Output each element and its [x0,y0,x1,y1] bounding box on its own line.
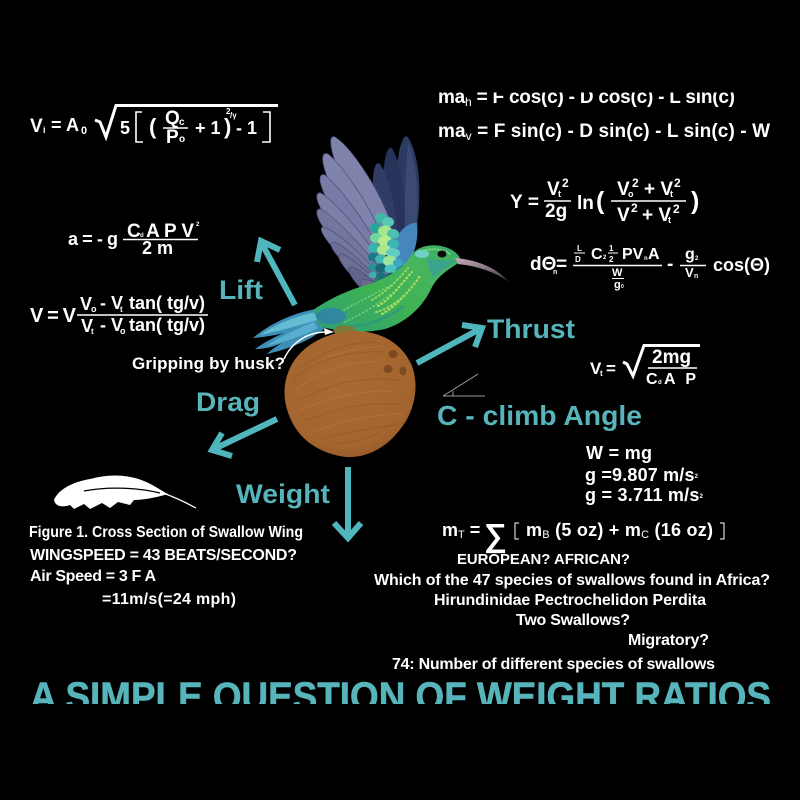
equation: flight path angle: dΘ [530,254,556,275]
text: wing notes: WINGSPEED = 43 BEATS/SECOND? [30,547,297,564]
equation: horizontal motion [439,92,734,107]
text: swallow questions: Two Swallows? [516,612,630,629]
head markings [415,250,456,278]
equation: horizontal motion: h [465,95,472,109]
equation: indicated velocity: 0 [81,125,87,137]
equation: flight path angle: 2 [609,255,614,264]
equation: total mass: (16 oz) [649,520,713,540]
equation: acceleration: C [127,221,141,242]
equation: flight path angle: C [591,246,603,263]
equation: flight path angle: n [644,256,648,262]
equation: terminal velocity: V [590,359,602,378]
equation: indicated velocity: Q [165,108,180,129]
tail [253,309,324,354]
equation: flight path angle: g [685,246,695,263]
equation: indicated velocity: V [30,116,43,137]
arrow: drag [212,419,277,456]
equation: weight and gravity: 2 [700,494,704,500]
equation: indicated velocity: P [166,127,179,148]
equation: weight and gravity: g =9.807 m/s [585,465,694,485]
label: thrust: Thrust [487,314,575,344]
equation: flight path angle: = [556,254,567,275]
equation: acceleration: 2 m [142,238,173,258]
equation: height: ( [596,187,605,215]
equation: total mass [442,517,724,554]
equation: velocity: tan( tg/v) [129,293,205,313]
text: swallow questions: Migratory? [628,632,709,649]
label: drag: Drag [196,387,260,417]
equation: indicated velocity: ( [149,114,157,139]
equation: vertical motion: v [466,129,472,143]
beak [455,258,509,282]
equation: flight path angle: g [614,279,621,291]
equation: velocity [30,293,208,336]
equation: height [510,176,699,226]
equation: terminal velocity: d [658,380,662,386]
equation: flight path angle: V [685,265,694,280]
equation: acceleration: A P V [146,221,194,242]
equation: velocity: t [91,327,94,336]
equation: height: 2 [562,176,569,190]
equation: acceleration [68,221,200,258]
equation: indicated velocity: i [43,125,46,135]
arrow: lift [257,241,295,305]
equation: terminal velocity: t [600,369,603,378]
equation: weight and gravity: 2 [695,474,699,480]
equation: weight and gravity: W = mg [586,443,652,463]
text: swallow questions: 74: Number of different species of swallows [392,656,715,673]
equation: height: t [668,215,671,225]
equation: indicated velocity: /γ [230,111,237,120]
callout: gripping by husk: Gripping by husk? [132,354,285,373]
label: climb angle: C - climb Angle [437,400,642,431]
body speckles [330,249,450,327]
equation: weight and gravity: g = 3.711 m/s [585,485,699,505]
equation: acceleration: a = - g [68,229,118,249]
equation: total mass: (5 oz) + m [550,520,641,540]
equation: indicated velocity: + 1 [195,118,221,138]
equation: indicated velocity: 5 [120,118,130,138]
equation: terminal velocity: 2mg [652,347,691,368]
text: swallow questions: EUROPEAN? AFRICAN? [457,551,630,568]
coconut [284,331,416,457]
icon: feather [54,475,196,509]
equation: indicated velocity: ) [224,114,231,139]
equation: flight path angle: 0 [621,284,624,290]
wing coverts [368,213,404,284]
coconut fibres [292,342,405,444]
equation: flight path angle: cos(Θ) [713,255,770,275]
equation: total mass: ∑ [484,517,507,554]
equation: terminal velocity: A P [664,371,696,388]
text: wing notes [29,524,303,608]
blue scapular feathers [392,223,417,266]
equation: flight path angle: n [553,269,557,276]
feet [333,325,355,337]
equation: indicated velocity: o [179,134,185,145]
equation: height: V [617,179,630,200]
equation: total mass: B [542,529,550,541]
equation: flight path angle: W [612,267,623,279]
equation: flight path angle: A [648,246,660,263]
equation: indicated velocity: = A [51,115,79,135]
equation: flight path angle [530,244,770,291]
equation: velocity: - V [100,293,123,313]
coconut eyes [384,350,406,376]
equation: weight and gravity [585,443,704,505]
equation: acceleration: 2 [196,222,200,228]
equation: flight path angle: - [667,254,673,275]
equation: height: 2 [632,176,639,190]
equation: indicated velocity: 2 [226,107,231,116]
equation: height: + V [644,179,673,200]
equation: total mass: m [442,520,458,540]
equation: terminal velocity: = [606,359,616,378]
equation: flight path angle: D [575,255,581,264]
text: wing notes: =11m/s(=24 mph) [102,591,236,608]
rump patch [316,308,346,324]
front wing feathers [317,137,396,296]
text: swallow questions: Which of the 47 species of swallows found in Africa? [374,572,770,589]
equation: velocity: tan( tg/v) [129,315,205,335]
equation: indicated velocity: c [179,117,185,128]
equation: velocity: o [120,326,126,336]
back wing feathers [366,136,419,248]
eye [438,250,446,258]
equation: height: o [628,189,634,199]
curved white arrow [284,328,334,359]
equation: horizontal motion: ma [438,87,465,108]
equation: flight path angle: 1 [609,244,614,253]
body [313,245,461,332]
arrow: thrust [417,325,482,363]
text: swallow questions [374,551,770,673]
equation: height: 2g [545,201,567,222]
text: swallow questions: Hirundinidae Pectrochelidon Perdita [434,592,706,609]
equation: flight path angle: L [577,244,582,253]
equation: terminal velocity: C [646,371,658,388]
hummingbird [253,136,509,354]
equation: height: ln [577,193,594,214]
equation: velocity: o [91,304,97,314]
equation: velocity: t [120,305,123,314]
equation: velocity: V [80,294,92,314]
equation: vertical motion: ma [438,121,466,142]
equation: total mass: = [465,520,480,540]
text: wing notes: Figure 1. Cross Section of Swallow Wing [29,524,303,541]
equation: flight path angle: 2 [695,256,699,262]
climb angle diagram [443,374,485,396]
equation: total mass: C [641,529,649,541]
label: lift: Lift [219,275,263,305]
equation: vertical motion: = F sin(c) - D sin(c) - L sin(c) - W [472,121,770,142]
label: weight: Weight [236,479,330,509]
equation: terminal velocity [590,346,700,388]
text: wing notes: Air Speed = 3 F A [30,568,156,585]
equation: velocity: V = V [30,305,77,327]
equation: total mass: m [526,520,542,540]
equation: height: ) [691,187,699,215]
equation: indicated velocity [30,106,278,148]
equation: height: t [670,189,673,199]
equation: height: 2 [631,201,638,215]
equation: flight path angle: n [694,273,698,280]
equation: height: t [558,189,561,199]
equation: velocity: - V [100,315,123,335]
equation: indicated velocity: - 1 [236,118,257,138]
equation: height: + V [642,205,671,226]
equation: horizontal motion: = F cos(c) - D cos(c) - L sin(c) [472,87,735,108]
equation: flight path angle: 2 [603,255,607,261]
equation: height: V [547,179,560,200]
equation: velocity: V [81,316,93,336]
equation: height: 2 [673,202,680,216]
equation: height: V [617,205,630,226]
equation: total mass: T [458,529,465,541]
equation: flight path angle: PV [622,246,644,263]
equation: height: 2 [674,176,681,190]
equation: acceleration: d [140,233,144,239]
equation: height: Y = [510,192,539,213]
arrow: weight [334,467,361,538]
callout: gripping by husk [132,328,334,373]
coconut lighter fibres [296,346,402,432]
